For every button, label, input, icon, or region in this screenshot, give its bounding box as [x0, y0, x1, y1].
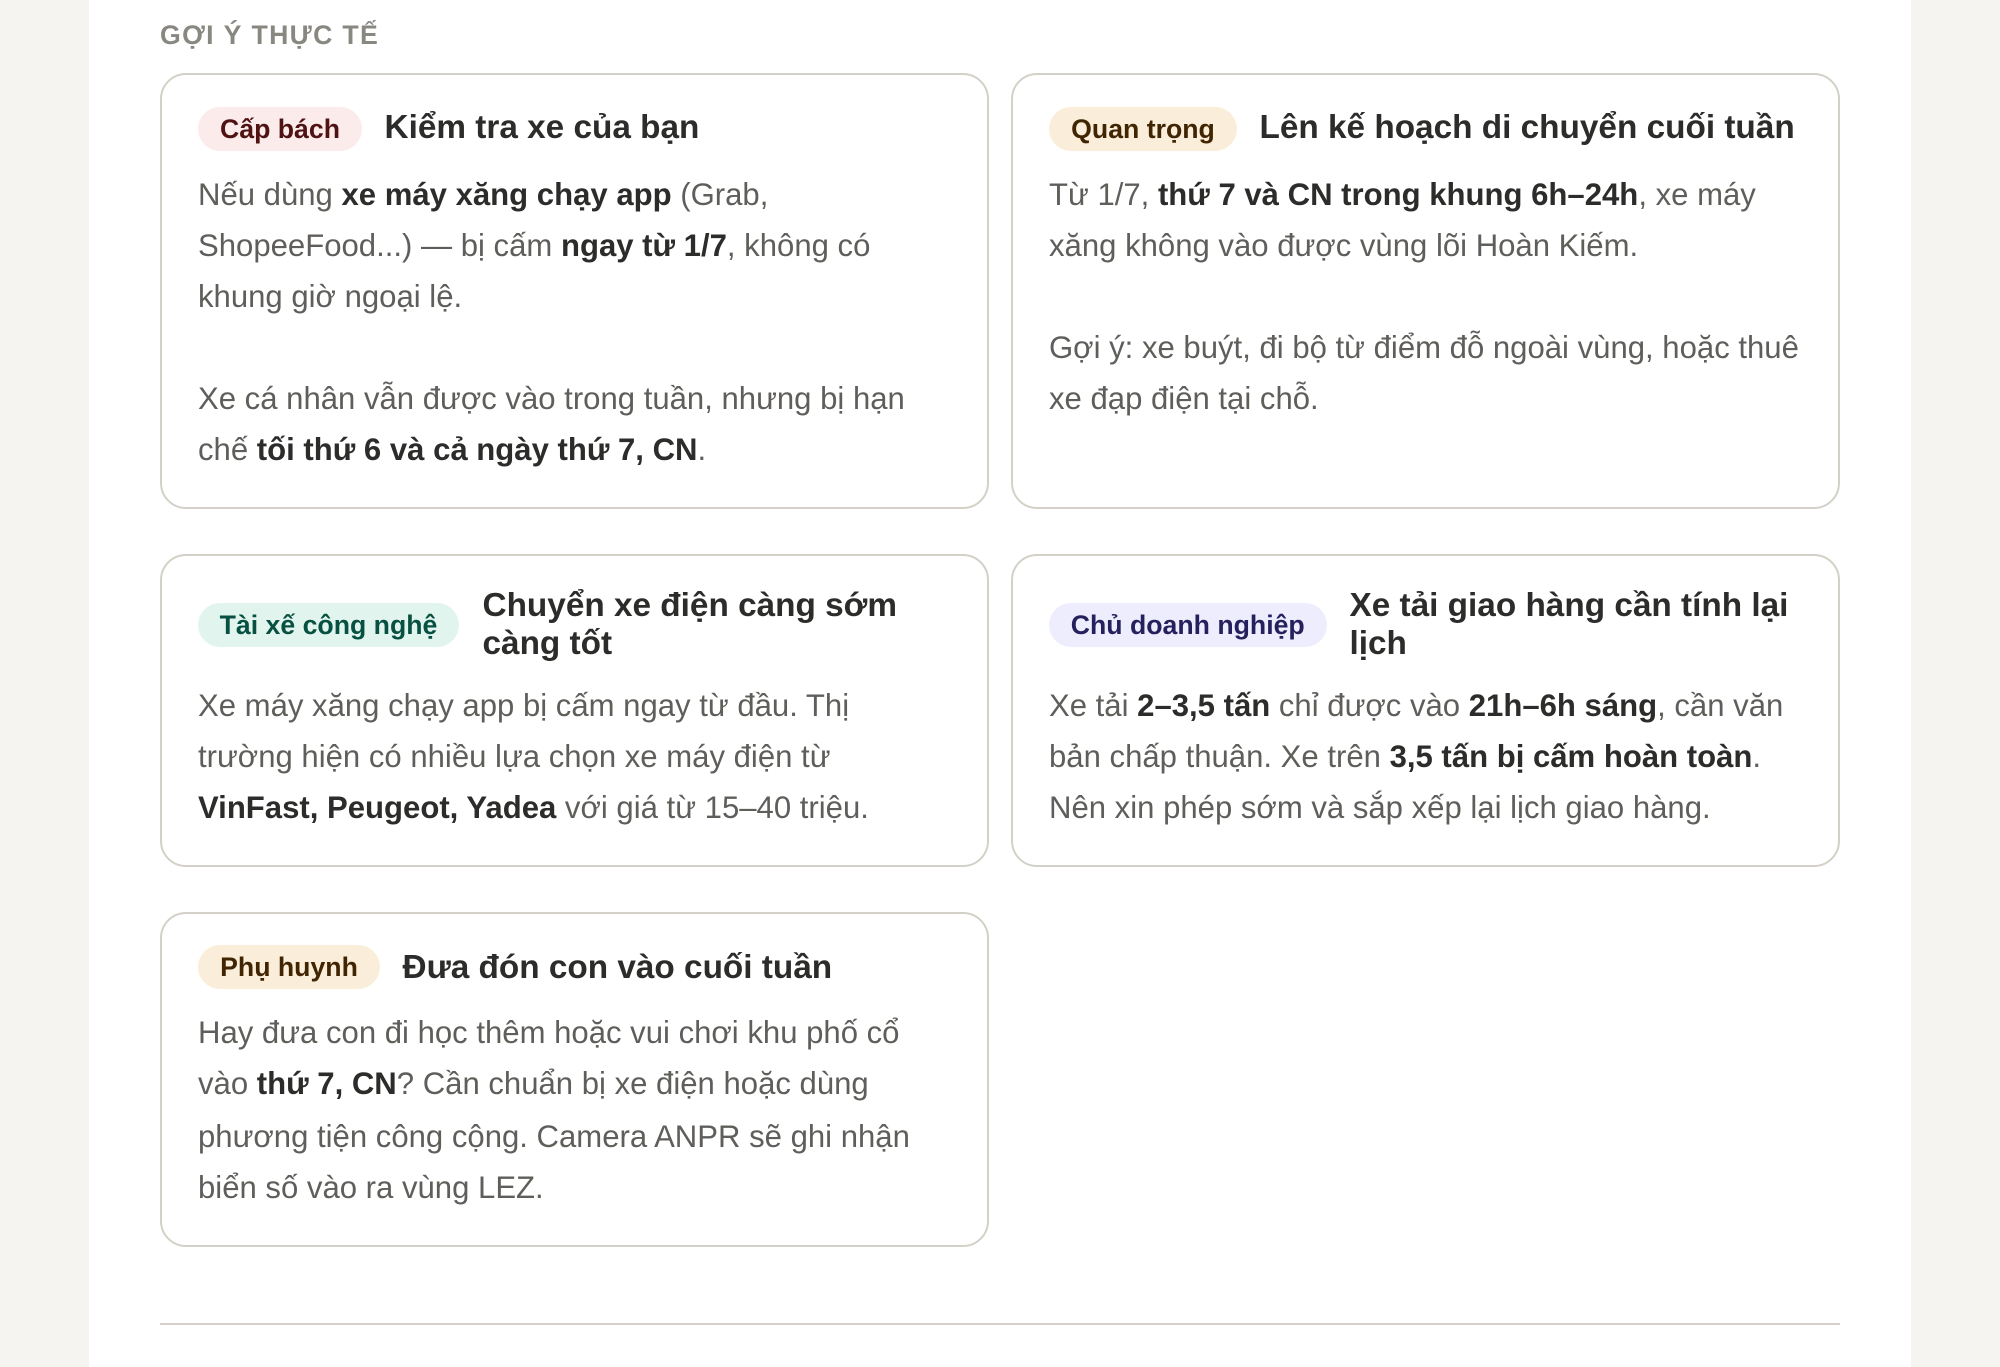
card text: kế hoạch cuối tuần: Từ 1/7, thứ 7 và CN trong khung 6h–24h, xe máy	[1049, 177, 1756, 212]
card title: kiểm tra xe: Kiểm tra xe của bạn	[384, 109, 699, 146]
card title: xe tải giao hàng	[1350, 587, 1788, 662]
card title: chuyển xe điện: Chuyển xe điện càng sớm	[482, 587, 897, 624]
card: kế hoạch cuối tuần	[1011, 73, 1840, 509]
card title: đưa đón con: Đưa đón con vào cuối tuần	[402, 949, 832, 986]
card text: kiểm tra xe: chế tối thứ 6 và cả ngày thứ 7, CN.	[198, 432, 706, 467]
badge: tài xế công nghệ	[198, 603, 459, 647]
footer rule	[160, 1323, 1840, 1325]
badge: cấp bách	[198, 107, 362, 151]
card: kiểm tra xe	[160, 73, 989, 509]
card title: chuyển xe điện: càng tốt	[482, 625, 612, 662]
badge: phụ huynh	[198, 945, 380, 989]
card text: kiểm tra xe: Nếu dùng xe máy xăng chạy app (Grab,	[198, 177, 768, 212]
card text: đưa đón con	[198, 1015, 910, 1205]
card text: kiểm tra xe: Xe cá nhân vẫn được vào trong tuần, nhưng bị hạn	[198, 381, 905, 416]
card title: kế hoạch cuối tuần: Lên kế hoạch di chuyển cuối tuần	[1260, 109, 1795, 146]
card text: xe tải giao hàng: bản chấp thuận. Xe trên 3,5 tấn bị cấm hoàn toàn.	[1049, 739, 1761, 774]
badge: cấp bách: Cấp bách	[220, 114, 340, 144]
card title: xe tải giao hàng: lịch	[1350, 625, 1407, 662]
card text: xe tải giao hàng: Xe tải 2–3,5 tấn chỉ được vào 21h–6h sáng, cần văn	[1049, 688, 1783, 723]
card title: chuyển xe điện	[482, 587, 897, 662]
badge: tài xế công nghệ: Tài xế công nghệ	[220, 610, 437, 640]
card: chuyển xe điện	[160, 554, 989, 867]
badge: quan trọng: Quan trọng	[1071, 114, 1215, 144]
card text: kiểm tra xe	[198, 177, 905, 467]
badge: quan trọng	[1049, 107, 1237, 151]
card text: xe tải giao hàng	[1049, 688, 1783, 825]
badge: chủ doanh nghiệp: Chủ doanh nghiệp	[1071, 610, 1305, 640]
card text: chuyển xe điện: VinFast, Peugeot, Yadea với giá từ 15–40 triệu.	[198, 790, 869, 825]
card text: đưa đón con: vào thứ 7, CN? Cần chuẩn bị xe điện hoặc dùng	[198, 1066, 869, 1101]
card: đưa đón con	[160, 912, 989, 1247]
card text: đưa đón con: biển số vào ra vùng LEZ.	[198, 1170, 544, 1205]
card text: chuyển xe điện: trường hiện có nhiều lựa chọn xe máy điện từ	[198, 739, 831, 774]
card text: đưa đón con: phương tiện công cộng. Camera ANPR sẽ ghi nhận	[198, 1119, 910, 1154]
card text: kế hoạch cuối tuần: xăng không vào được vùng lõi Hoàn Kiếm.	[1049, 228, 1638, 263]
card text: kiểm tra xe: ShopeeFood...) — bị cấm ngay từ 1/7, không có	[198, 228, 870, 263]
section heading: GỢI Ý THỰC TẾ	[160, 20, 379, 50]
card text: chuyển xe điện: Xe máy xăng chạy app bị cấm ngay từ đầu. Thị	[198, 688, 849, 723]
card text: xe tải giao hàng: Nên xin phép sớm và sắp xếp lại lịch giao hàng.	[1049, 790, 1711, 825]
card text: kiểm tra xe: khung giờ ngoại lệ.	[198, 279, 462, 314]
card text: chuyển xe điện	[198, 688, 869, 825]
card text: kế hoạch cuối tuần: Gợi ý: xe buýt, đi bộ từ điểm đỗ ngoài vùng, hoặc thuê	[1049, 330, 1799, 365]
card title: xe tải giao hàng: Xe tải giao hàng cần tính lại	[1350, 587, 1788, 624]
badge: chủ doanh nghiệp	[1049, 603, 1326, 647]
card text: đưa đón con: Hay đưa con đi học thêm hoặc vui chơi khu phố cổ	[198, 1015, 899, 1050]
card text: kế hoạch cuối tuần	[1049, 177, 1799, 416]
badge: phụ huynh: Phụ huynh	[220, 952, 358, 982]
card: xe tải giao hàng	[1011, 554, 1840, 867]
card text: kế hoạch cuối tuần: xe đạp điện tại chỗ.	[1049, 381, 1319, 416]
